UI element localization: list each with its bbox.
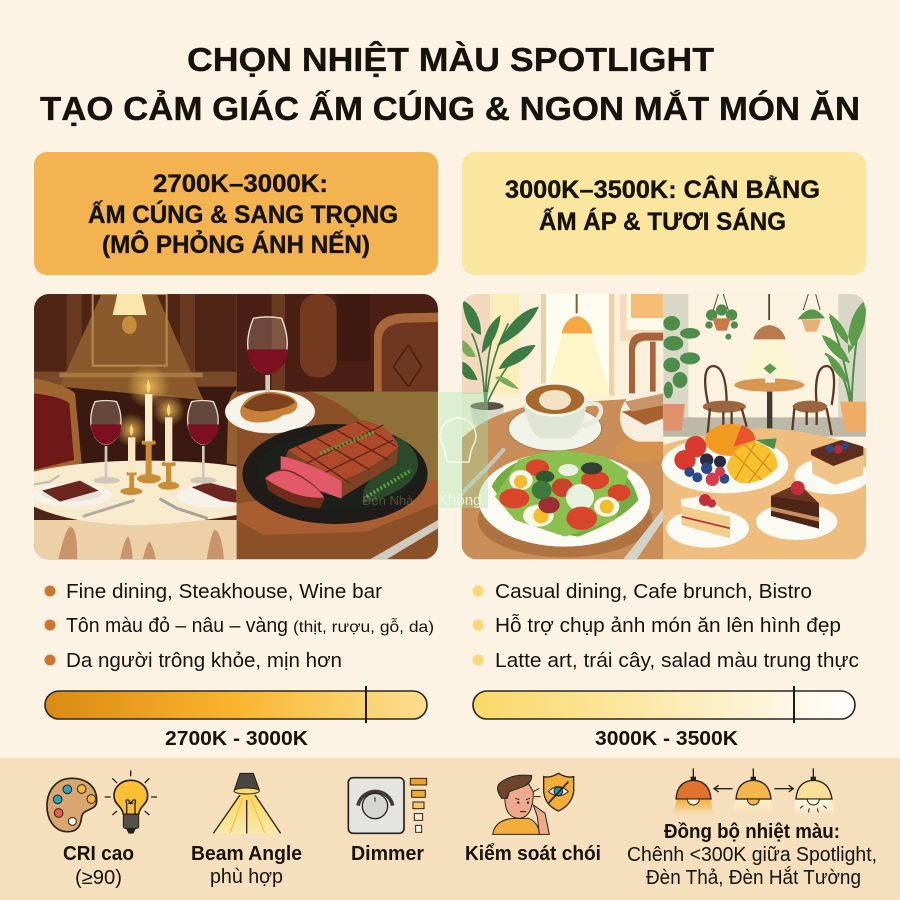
panel: tips band — [0, 758, 900, 900]
panel: warm header 2700K-3000K: (MÔ PHỎNG ÁNH NẾN) — [102, 229, 370, 259]
text: glare control: Kiểm soát chói — [465, 843, 601, 865]
list: warm uses — [44, 581, 434, 672]
right wall — [237, 294, 438, 394]
right table — [237, 392, 438, 559]
chair — [629, 333, 663, 393]
hanging plants — [713, 294, 820, 310]
panel: warm header 2700K-3000K — [34, 152, 438, 275]
pendant lamp — [545, 333, 610, 396]
list: warm uses: Da người trông khỏe, mịn hơn — [66, 650, 342, 672]
text: color sync — [627, 821, 877, 889]
wine glasses — [91, 400, 121, 444]
color temperature bar 2700K-3000K: 2700K - 3000K — [165, 728, 309, 750]
list: warm uses: Fine dining, Steakhouse, Wine bar — [66, 581, 382, 603]
color temperature bar 3000K-3500K — [473, 686, 855, 750]
cafe pendant — [768, 294, 770, 320]
pastry — [615, 438, 664, 464]
title: CHỌN NHIỆT MÀU SPOTLIGHT — [187, 41, 714, 78]
candle glow — [128, 367, 168, 407]
salad plate — [478, 510, 652, 558]
text: color sync: Đồng bộ nhiệt màu: — [664, 821, 840, 843]
watermark: Không — [438, 492, 481, 509]
icon: three pendant lamps with arrows — [673, 768, 835, 815]
left plant cafe — [663, 316, 700, 398]
left chair — [34, 378, 82, 472]
panel: warm header 2700K-3000K: ẤM CÚNG & SANG TRỌNG — [88, 199, 398, 229]
cream cake — [666, 509, 749, 548]
right plant — [825, 303, 863, 403]
steak — [280, 420, 398, 498]
panel: balanced header 3000K-3500K — [462, 152, 866, 275]
illustration: fine dining and steak — [32, 294, 438, 559]
panel: balanced header 3000K-3500K: 3000K–3500K: CÂN BẰNG — [505, 174, 820, 204]
color temperature bar 3000K-3500K: 3000K - 3500K — [595, 728, 739, 750]
chocolate cake — [756, 503, 837, 540]
plates — [32, 483, 112, 507]
list: balanced uses: Casual dining, Cafe brunch, Bistro — [495, 581, 812, 603]
salad ingredients — [526, 459, 549, 476]
watermark: Đèn Nhà — [362, 493, 414, 508]
fruit plate — [662, 437, 788, 493]
skillet — [242, 424, 428, 524]
saucer and latte cup — [508, 406, 602, 451]
icon: glare control person — [493, 773, 574, 834]
wall lamp — [113, 294, 147, 315]
text: dimmer: Dimmer — [351, 843, 424, 865]
text: CRI: (≥90) — [75, 867, 122, 889]
text: beam angle — [191, 843, 302, 888]
illustration: casual cafe and brunch food — [462, 294, 869, 559]
list: balanced uses — [472, 581, 859, 672]
table cloth — [34, 520, 237, 559]
icon: palette and bulb — [47, 770, 157, 834]
text: CRI: CRI cao — [63, 843, 134, 865]
right chair — [374, 313, 438, 397]
list: warm uses: (thịt, rượu, gỗ, da) — [293, 617, 434, 636]
fork — [462, 450, 503, 493]
text: color sync: Chênh <300K giữa Spotlight, — [627, 844, 877, 866]
icon: dimmer — [348, 778, 427, 833]
wine glass — [248, 317, 287, 373]
icon: beam angle — [213, 773, 281, 833]
list: balanced uses: Latte art, trái cây, salad màu trung thực — [495, 650, 859, 672]
plant left — [471, 323, 509, 402]
panel: balanced header 3000K-3500K: ẤM ÁP & TƯƠI SÁNG — [539, 207, 786, 236]
text: CRI — [63, 843, 134, 889]
text: color sync: Đèn Thả, Đèn Hắt Tường — [646, 866, 861, 889]
text: beam angle: Beam Angle — [191, 843, 302, 865]
bread plate — [225, 390, 315, 433]
chairs and table — [705, 366, 727, 405]
color temperature bar 2700K-3000K — [45, 686, 427, 750]
candles — [128, 437, 135, 473]
left wall — [34, 294, 237, 559]
cake right — [794, 460, 866, 494]
watermark — [362, 392, 488, 509]
list: balanced uses: Hỗ trợ chụp ảnh món ăn lên hình đẹp — [495, 614, 841, 637]
knife — [370, 520, 438, 559]
candle holders — [120, 441, 179, 495]
panel: warm header 2700K-3000K: 2700K–3000K: — [153, 170, 328, 198]
cutlery — [84, 501, 133, 516]
list: warm uses: Tôn màu đỏ – nâu – vàng — [66, 615, 288, 637]
rosemary — [320, 432, 412, 497]
title — [40, 41, 860, 127]
table — [462, 397, 663, 559]
cafe background — [663, 294, 666, 454]
big table — [663, 428, 866, 559]
text: beam angle: phù hợp — [210, 866, 283, 888]
knife — [623, 508, 663, 559]
title: TẠO CẢM GIÁC ẤM CÚNG & NGON MẮT MÓN ĂN — [40, 90, 860, 127]
